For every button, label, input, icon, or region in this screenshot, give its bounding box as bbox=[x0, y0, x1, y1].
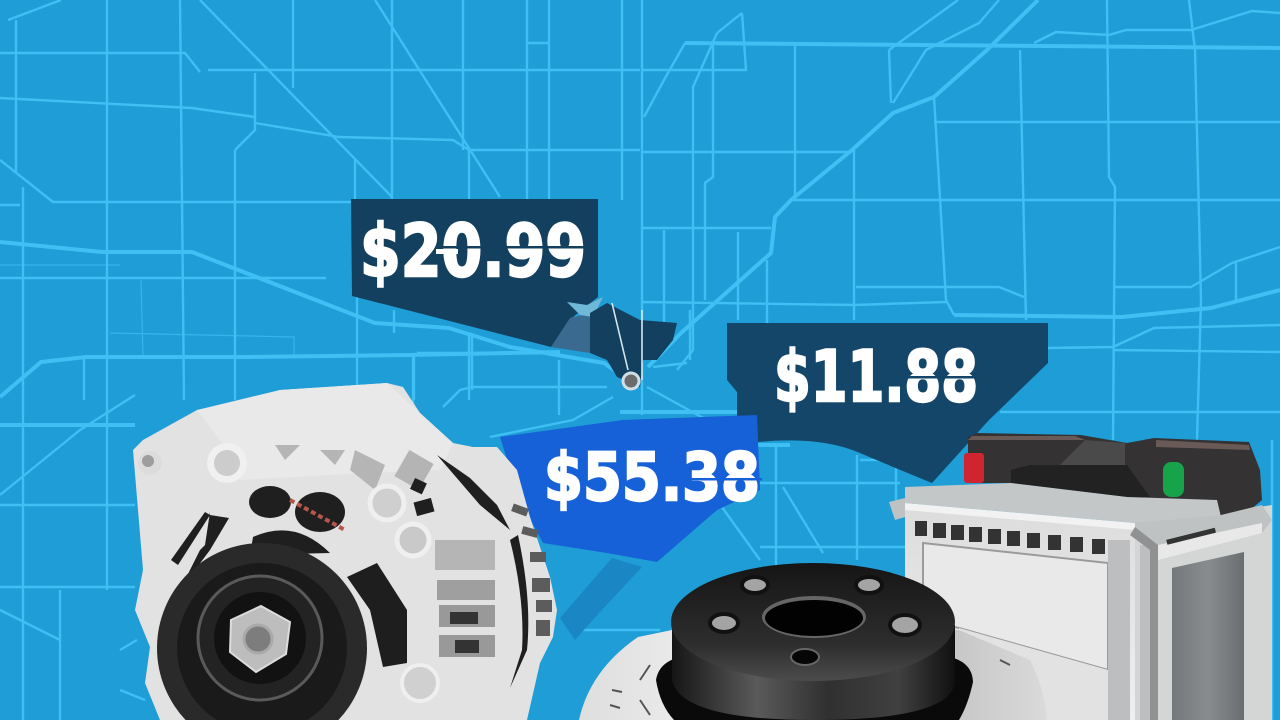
disc hub bbox=[656, 655, 973, 720]
icon: car battery bbox=[889, 433, 1272, 720]
icon: alternator bbox=[133, 383, 557, 720]
battery translucent lid bbox=[905, 483, 1221, 523]
price tag: $55.38 bbox=[500, 415, 762, 640]
battery side panel bbox=[1172, 552, 1244, 720]
price tag: $20.99 bbox=[351, 199, 598, 347]
price tag: $11.88: $11.88 bbox=[774, 336, 978, 418]
price tag: $11.88 bbox=[727, 323, 1048, 483]
battery terminals bbox=[964, 453, 984, 483]
battery vent slots bbox=[915, 521, 1105, 554]
battery case bbox=[905, 505, 1135, 720]
icon: brake disc bbox=[579, 563, 1047, 720]
housing details bbox=[138, 443, 495, 657]
battery lid black bbox=[968, 433, 1262, 533]
map pin centre bbox=[551, 297, 677, 389]
windings and vents bbox=[171, 455, 528, 688]
battery front panel bbox=[923, 543, 1108, 670]
price tag: $55.38: $55.38 bbox=[544, 439, 760, 516]
cooling fins bbox=[511, 504, 552, 636]
price tag: $20.99: $20.99 bbox=[360, 209, 586, 293]
